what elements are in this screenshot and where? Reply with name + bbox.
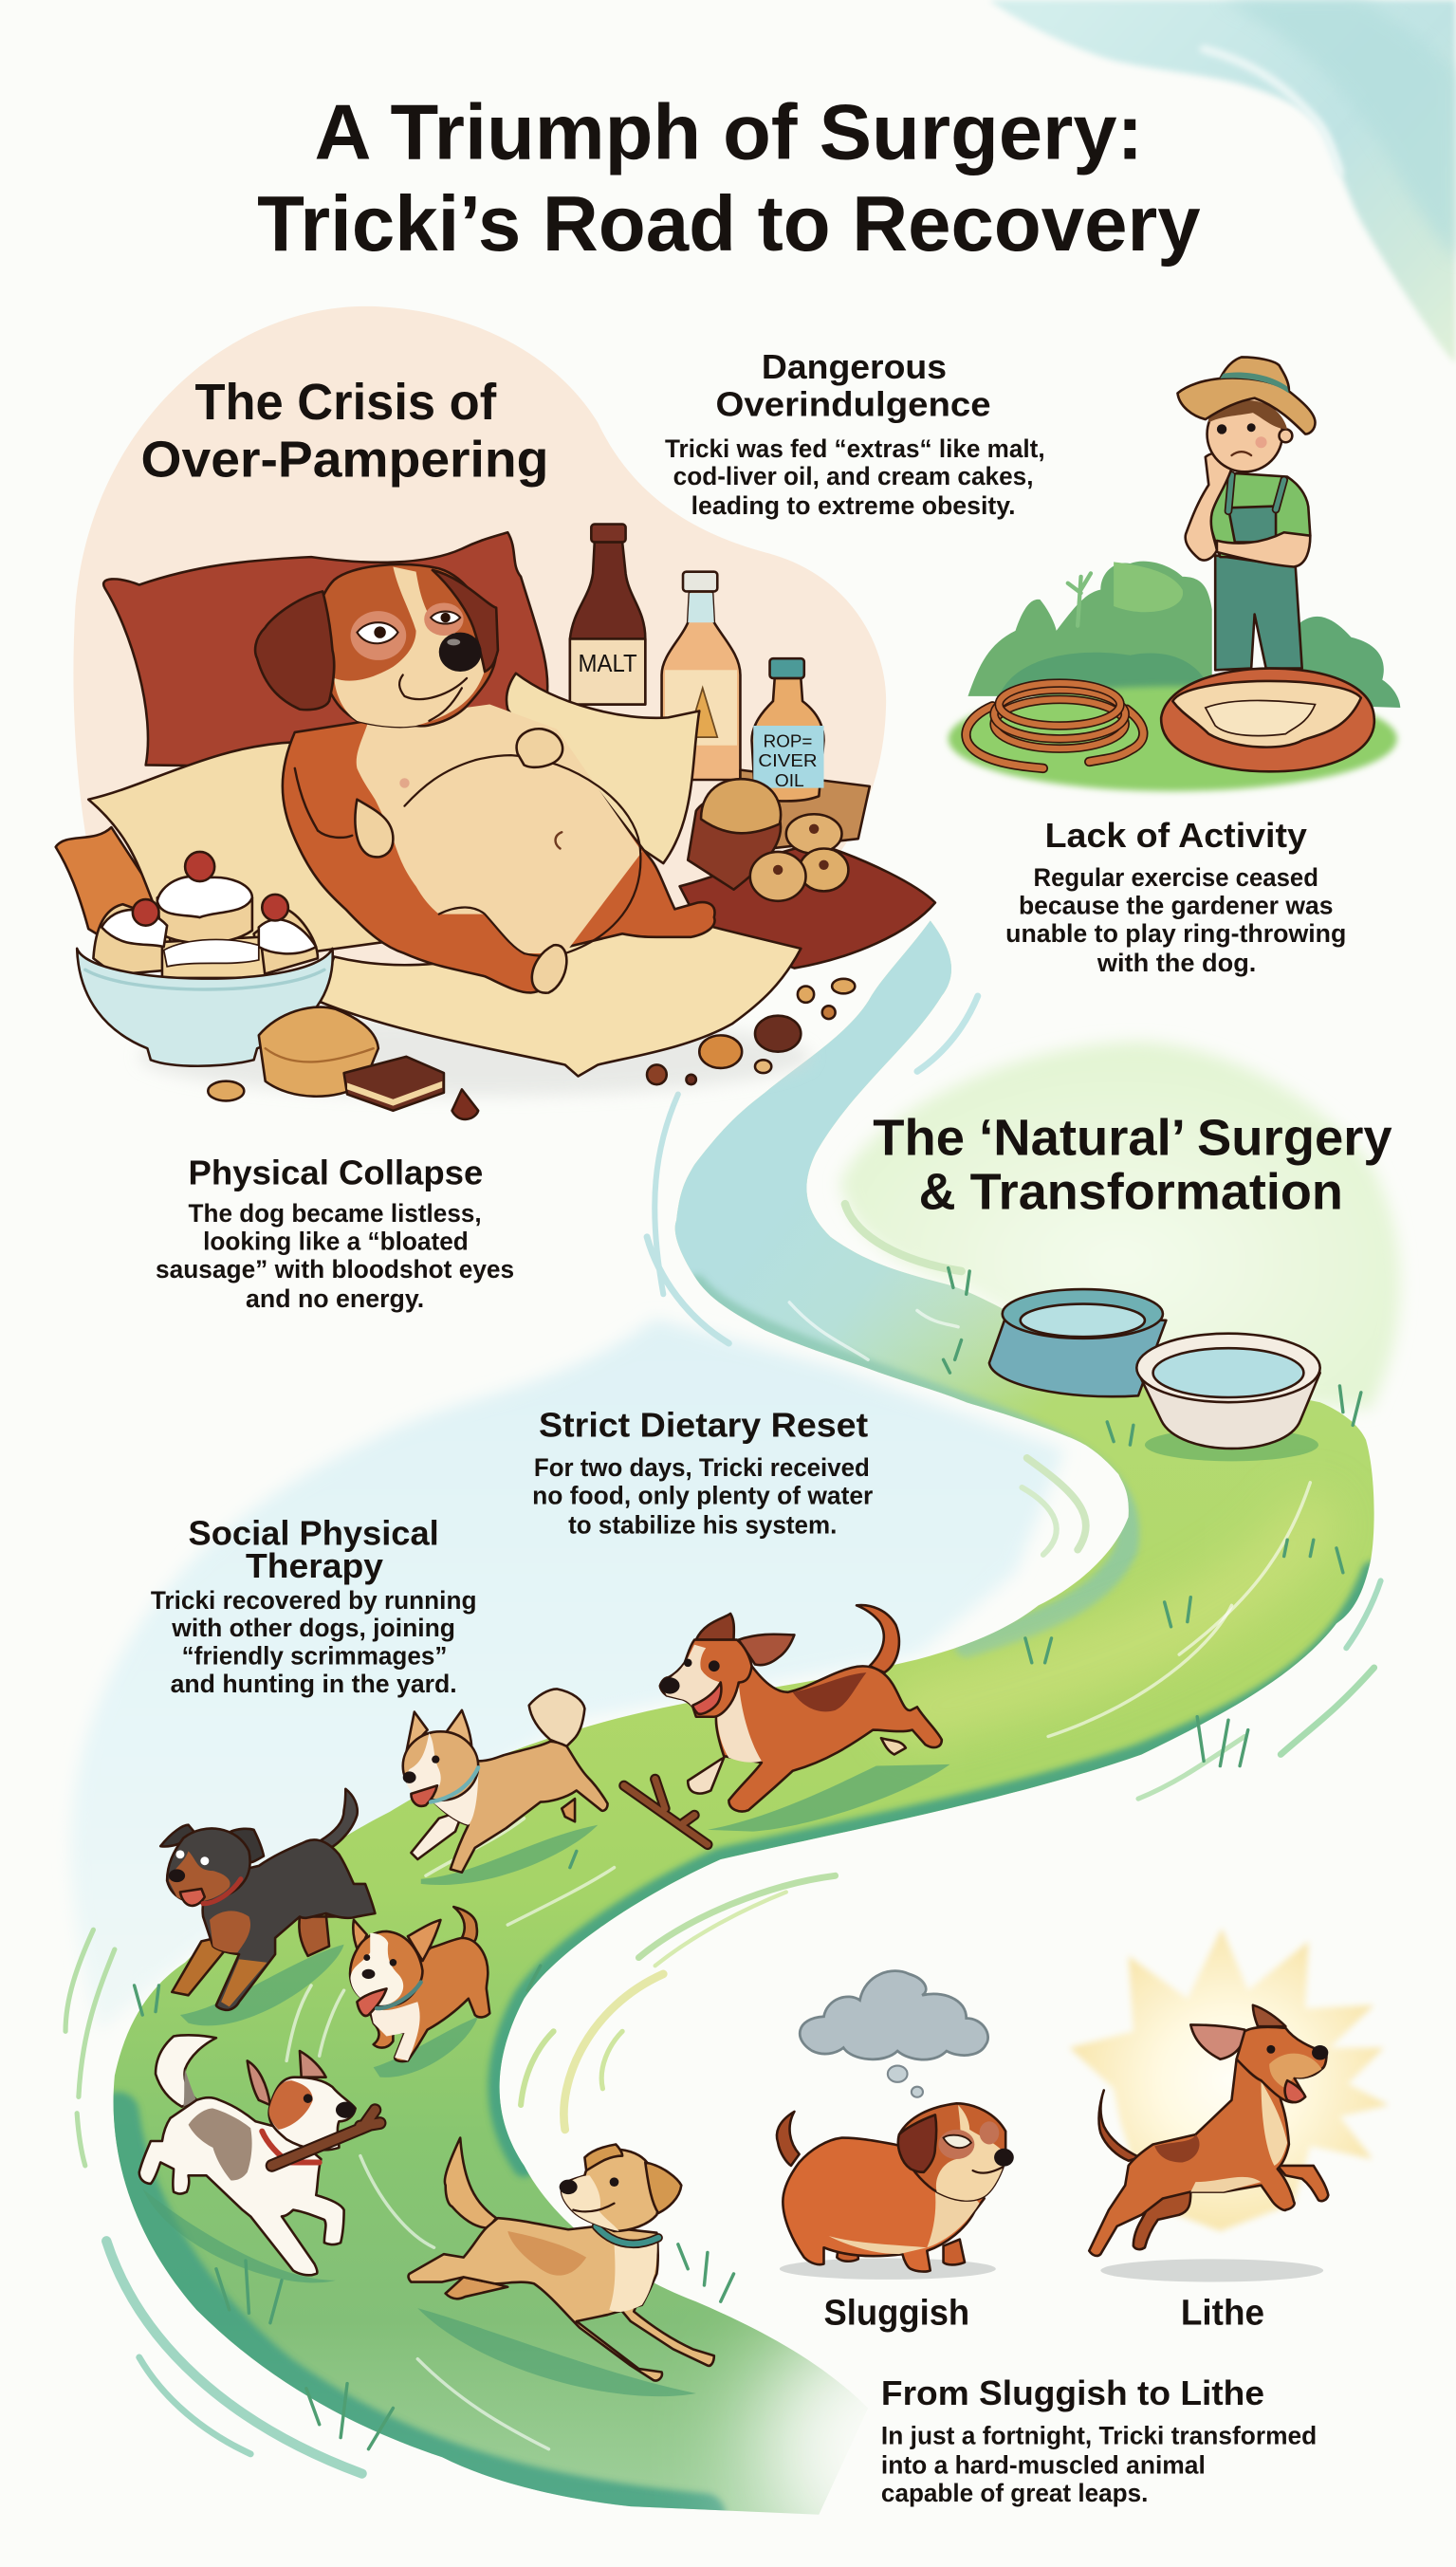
heading: The Natural Surgery and Transformation	[873, 1110, 1392, 1220]
text block: Dangerous Overindulgence: cod-liver oil, and cream cakes,	[673, 462, 1034, 490]
icon: fat dog	[777, 2103, 1014, 2272]
text block: Dangerous Overindulgence: leading to extreme obesity.	[691, 491, 1016, 520]
crumbs on the floor	[208, 979, 855, 1119]
icon: golden dog	[409, 2138, 714, 2380]
grass shadows under running dogs	[142, 1764, 949, 2396]
icon: grass ground	[949, 687, 1397, 791]
icon: big cream bottom pillow	[318, 906, 801, 1077]
text block: From Sluggish to Lithe: From Sluggish to Lithe	[881, 2373, 1264, 2412]
icon: coiled hose	[966, 683, 1143, 768]
background: peach blob behind the crisis scene	[73, 306, 886, 1048]
text block: From Sluggish to Lithe: capable of great leaps.	[881, 2479, 1148, 2507]
icon: malt bottle	[570, 525, 645, 705]
icon: muffin square	[259, 1007, 378, 1097]
text block: From Sluggish to Lithe: In just a fortnight, Tricki transformed	[881, 2421, 1317, 2449]
icon: orange side pillow	[56, 827, 157, 947]
icon: gardener	[1177, 357, 1316, 670]
icon: ground shadow	[1100, 2259, 1323, 2282]
text block: Social Physical Therapy: “friendly scrimmages”	[182, 1641, 447, 1670]
icon: brownie	[344, 1057, 444, 1111]
icon: dark red right pillow	[680, 843, 935, 969]
text block: Physical Collapse: The dog became listless,	[189, 1199, 482, 1228]
text block: From Sluggish to Lithe	[881, 2373, 1317, 2507]
text block: Social Physical Therapy: with other dogs, joining	[171, 1614, 455, 1642]
title	[257, 88, 1201, 268]
icon: muffin and cookies	[688, 779, 848, 901]
icon: black rottweiler dog	[160, 1789, 375, 2010]
text block: Physical Collapse: looking like a “bloated	[203, 1228, 469, 1256]
icon: white dog with stick	[139, 2035, 380, 2275]
icon: white bowl	[1136, 1334, 1320, 1461]
text block: Physical Collapse	[156, 1154, 514, 1313]
icon: dog bed	[1161, 669, 1374, 771]
icon: cream left pillow	[88, 742, 385, 967]
text block: Social Physical Therapy	[151, 1513, 476, 1698]
text block: Lack of Activity: unable to play ring-throwing	[1005, 919, 1346, 948]
label: Lithe: Lithe	[1181, 2293, 1264, 2333]
icon: running orange dog	[660, 1605, 942, 1811]
heading: The Natural Surgery and Transformation: & Transformation	[919, 1164, 1343, 1220]
background: top-right teal wave	[989, 0, 1456, 363]
icon: grey thought cloud	[800, 1971, 988, 2097]
text block: Social Physical Therapy: Tricki recovered by running	[151, 1586, 476, 1615]
illustration: gardener with hose and dog bed	[949, 357, 1400, 791]
icon: blue bowl	[989, 1289, 1166, 1396]
text block: Social Physical Therapy: Social Physical	[189, 1513, 439, 1552]
icon: malt bottle: MALT	[579, 651, 637, 677]
icon: cod-liver oil bottle: OIL	[775, 771, 804, 790]
icon: amber bottle	[662, 572, 740, 780]
icon: tan dog with curly tail	[403, 1689, 608, 1873]
icon: bushes	[968, 562, 1400, 708]
text block: Strict Dietary Reset: For two days, Tricki received	[534, 1453, 870, 1482]
icon: cod-liver oil bottle: CIVER	[758, 751, 818, 770]
icon: cod-liver oil bottle: ROP=	[764, 731, 812, 750]
text block: Lack of Activity	[1005, 816, 1346, 977]
text block: Physical Collapse: Physical Collapse	[189, 1154, 483, 1192]
icon: sun burst	[1070, 1929, 1389, 2231]
text block: Dangerous Overindulgence	[665, 347, 1045, 520]
text block: Strict Dietary Reset: Strict Dietary Reset	[539, 1405, 868, 1444]
icon: cakes in bowl	[77, 852, 333, 1066]
title: Tricki’s Road to Recovery	[257, 179, 1201, 268]
icon: water bowls	[989, 1289, 1320, 1461]
text block: Lack of Activity: Lack of Activity	[1045, 816, 1307, 855]
text block: Lack of Activity: because the gardener was	[1019, 892, 1334, 920]
text block: Strict Dietary Reset: to stabilize his system.	[568, 1510, 837, 1539]
illustration: sluggish dog under cloud	[777, 1971, 1014, 2280]
text block: Dangerous Overindulgence: Overindulgence	[716, 385, 991, 424]
text block: Physical Collapse: sausage” with bloodshot eyes	[156, 1255, 514, 1284]
text block: Lack of Activity: Regular exercise ceased	[1034, 863, 1318, 892]
icon: ground shadow	[780, 2258, 996, 2280]
background: pale blue blob behind therapy text	[71, 1319, 1064, 2031]
road: winding river turning into green path	[114, 901, 1374, 2515]
text block: From Sluggish to Lithe: into a hard-muscled animal	[881, 2451, 1206, 2480]
background: pale green blob behind natural surgery	[840, 1042, 1400, 1409]
text block: Dangerous Overindulgence: Dangerous	[762, 347, 947, 386]
main illustration: pampered dog on pillows	[56, 525, 935, 1119]
text block: Dangerous Overindulgence: Tricki was fed “extras“ like malt,	[665, 434, 1045, 463]
text block: Strict Dietary Reset: no food, only plenty of water	[532, 1481, 873, 1509]
heading: The Crisis of Over-Pampering	[140, 375, 548, 489]
heading: The Crisis of Over-Pampering: The Crisis of	[194, 375, 496, 431]
icon: stick	[624, 1779, 708, 1844]
icon: corgi dog	[350, 1907, 489, 2061]
heading: The Natural Surgery and Transformation: The ‘Natural’ Surgery	[873, 1110, 1392, 1166]
icon: leaping dog	[1089, 2005, 1328, 2256]
icon: cod-liver oil bottle	[752, 658, 824, 801]
icon: wooden box	[740, 770, 870, 852]
text block: Social Physical Therapy: and hunting in the yard.	[171, 1670, 457, 1698]
text block: Social Physical Therapy: Therapy	[246, 1546, 383, 1585]
road surface strokes and grass	[65, 1268, 1381, 2474]
text block: Strict Dietary Reset	[532, 1405, 873, 1539]
icon: fat Tricki dog	[255, 564, 715, 993]
illustration: lithe dog with sunburst	[1070, 1929, 1389, 2282]
title: A Triumph of Surgery:	[315, 88, 1143, 176]
text block: Lack of Activity: with the dog.	[1097, 949, 1256, 977]
river side wisps	[647, 996, 1086, 1555]
text block: Physical Collapse: and no energy.	[246, 1284, 424, 1313]
heading: The Crisis of Over-Pampering: Over-Pampering	[140, 433, 548, 489]
icon: red back pillow	[103, 532, 547, 770]
icon: cream right pillow	[507, 674, 699, 863]
label: Sluggish: Sluggish	[824, 2293, 969, 2333]
